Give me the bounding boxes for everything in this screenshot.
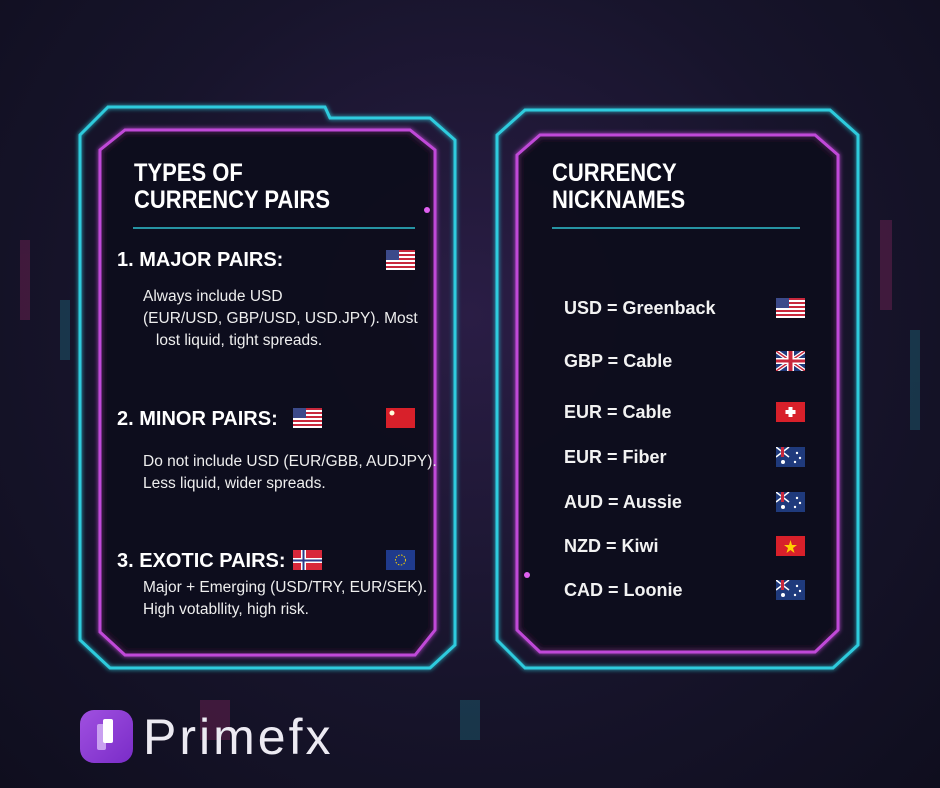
major body: lost liquid, tight spreads. bbox=[156, 332, 322, 349]
exotic heading: 3. EXOTIC PAIRS: bbox=[117, 550, 286, 572]
minor body: Less liquid, wider spreads. bbox=[143, 475, 326, 492]
major pairs heading: 1. MAJOR PAIRS: bbox=[117, 249, 283, 271]
flag: US minor bbox=[293, 408, 322, 428]
major body: (EUR/USD, GBP/USD, USD.JPY). Most bbox=[143, 310, 418, 327]
left title: TYPES OF bbox=[134, 159, 243, 187]
exotic body: High votabllity, high risk. bbox=[143, 601, 309, 618]
nickname list bbox=[564, 298, 805, 600]
nickname list: CAD = Loonie bbox=[564, 580, 683, 600]
exotic body: Major + Emerging (USD/TRY, EUR/SEK). bbox=[143, 579, 427, 596]
right title bbox=[552, 159, 685, 214]
major body bbox=[143, 288, 418, 349]
nickname list: USD = Greenback bbox=[564, 298, 716, 318]
right title: CURRENCY bbox=[552, 159, 677, 187]
nickname list: EUR = Fiber bbox=[564, 447, 667, 467]
right panel frames bbox=[497, 110, 858, 668]
left title: CURRENCY PAIRS bbox=[134, 186, 330, 214]
brand name: Primefx bbox=[143, 709, 333, 765]
nickname list: NZD = Kiwi bbox=[564, 536, 659, 556]
flag: US bbox=[386, 250, 415, 270]
exotic body bbox=[143, 579, 427, 618]
minor pairs heading: 2. MINOR PAIRS: bbox=[117, 408, 278, 430]
minor body: Do not include USD (EUR/GBB, AUDJPY). bbox=[143, 453, 437, 470]
flag: EU bbox=[386, 550, 415, 570]
left panel frames bbox=[80, 107, 455, 668]
nickname list: EUR = Cable bbox=[564, 402, 672, 422]
nickname list: AUD = Aussie bbox=[564, 492, 682, 512]
major body: Always include USD bbox=[143, 288, 283, 305]
nickname list: GBP = Cable bbox=[564, 351, 672, 371]
left title bbox=[134, 159, 330, 214]
logo bbox=[80, 709, 333, 765]
flag: China bbox=[386, 408, 415, 428]
icon: candle logo bbox=[80, 710, 133, 763]
minor body bbox=[143, 453, 437, 492]
flag: Norway bbox=[293, 550, 322, 570]
right title: NICKNAMES bbox=[552, 186, 685, 214]
